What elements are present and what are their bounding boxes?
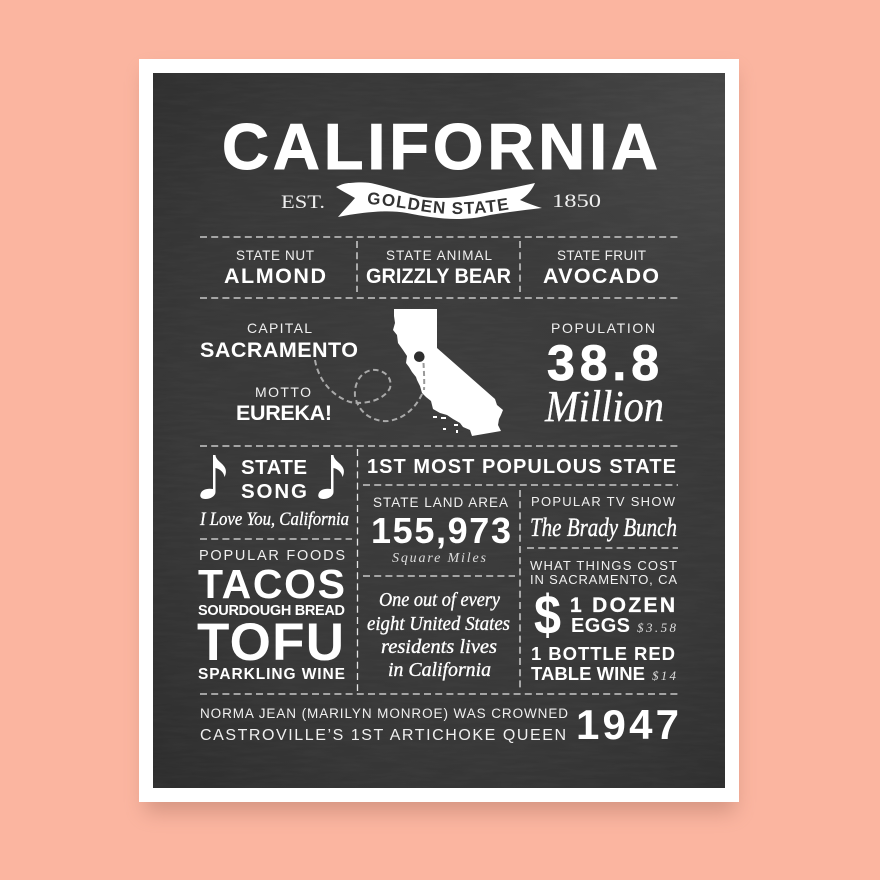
population: Million [544,382,664,431]
state fruit [543,248,659,288]
state animal: GRIZZLY BEAR [366,264,511,288]
cost of things: $3.58 [637,620,676,635]
state song: I Love You, California [199,509,349,530]
popular foods: SOURDOUGH BREAD [198,603,345,619]
state song: SONG [241,480,307,503]
state silhouette [393,309,503,436]
cost of things: $14 [652,668,676,683]
residents fact: eight United States [367,613,510,635]
chalkboard panel [153,73,725,788]
dashed route on map [422,363,425,390]
artichoke queen fact [200,701,679,748]
state nut [224,248,326,288]
cost of things: 1 DOZEN [570,594,675,617]
sacramento marker [414,351,425,362]
motto [236,384,332,425]
popular foods: TACOS [198,561,345,607]
cost of things: TABLE WINE [531,663,645,684]
capital: SACRAMENTO [200,338,358,362]
tv show [530,494,677,542]
state animal [366,248,511,288]
population: 38.8 [547,335,659,391]
cost of things: EGGS [571,615,630,637]
motto: EUREKA! [236,401,332,425]
state song [199,455,349,530]
est label: EST. [281,192,325,213]
state nut: ALMOND [224,264,326,288]
islands [433,416,458,433]
cost of things [530,558,677,684]
white print frame [139,59,739,802]
residents fact [367,589,510,681]
print shadow [145,72,735,812]
artichoke queen fact: NORMA JEAN (MARILYN MONROE) WAS CROWNED [200,706,568,721]
state nut: STATE NUT [236,248,314,263]
capital: CAPITAL [247,320,312,336]
banner text: GOLDEN STATE [368,192,508,214]
icon: music note left [200,455,226,499]
popular foods: POPULAR FOODS [199,548,345,564]
popular foods: TOFU [197,613,344,672]
residents fact: residents lives [381,636,497,658]
land area: Square Miles [392,551,487,566]
banner ribbon [336,182,542,219]
population [544,320,664,431]
cost of things: WHAT THINGS COST [530,558,677,573]
cost of things: 1 BOTTLE RED [531,643,675,664]
tv show: The Brady Bunch [530,513,677,542]
state fruit: STATE FRUIT [557,248,646,263]
land area: STATE LAND AREA [373,495,508,510]
founding year: 1850 [552,191,601,212]
cost of things: IN SACRAMENTO, CA [530,572,677,587]
motto: MOTTO [255,384,311,400]
capital [200,320,358,362]
artichoke queen fact: CASTROVILLE’S 1ST ARTICHOKE QUEEN [200,727,566,744]
section dividers [200,237,678,694]
tv show: POPULAR TV SHOW [531,494,676,509]
established row with banner [281,182,601,219]
state animal: STATE ANIMAL [386,248,492,263]
most populous heading: 1ST MOST POPULOUS STATE [367,456,676,478]
artichoke queen fact: 1947 [576,701,679,748]
state song: STATE [241,456,307,479]
population: POPULATION [551,320,655,336]
land area [371,495,511,566]
icon: dollar sign: $ [534,583,561,646]
popular foods [197,548,345,683]
residents fact: One out of every [379,589,500,611]
residents fact: in California [388,659,491,681]
land area: 155,973 [371,510,511,551]
popular foods: SPARKLING WINE [198,666,345,683]
dashed route off map [315,360,423,421]
state fruit: AVOCADO [543,264,659,288]
title: CALIFORNIA [222,110,658,183]
california map with route [315,309,503,436]
icon: music note right [318,455,344,499]
